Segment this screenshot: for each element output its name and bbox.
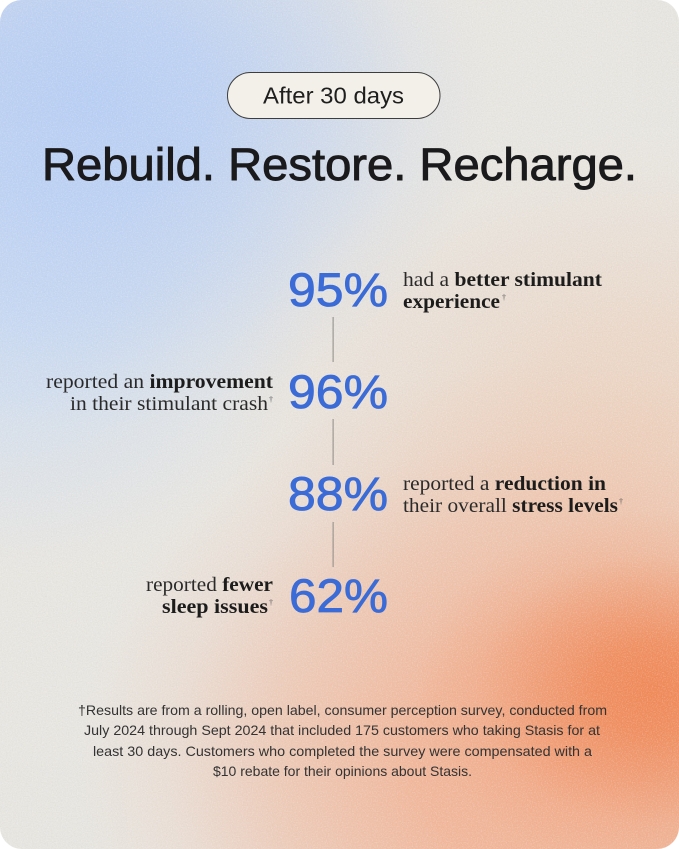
stat: 88% reduction in stress levels: † [619,497,623,506]
title: Rebuild. Restore. Recharge. [42,139,637,190]
stat: 96% improvement in stimulant crash: in their stimulant crash [70,394,268,415]
stat: 62% fewer sleep issues: † [269,598,273,607]
stat: 95% better stimulant experience [288,263,603,316]
stat: 95% better stimulant experience: † [502,293,506,302]
stat: 62% fewer sleep issues [146,569,388,622]
stat: 62% fewer sleep issues: reported fewer [146,575,273,596]
badge: After 30 days [228,72,440,118]
stat: 88% reduction in stress levels: 88% [288,467,388,520]
stat: 95% better stimulant experience: had a better stimulant [403,270,603,291]
stat: 95% better stimulant experience: 95% [288,263,388,316]
stat: 62% fewer sleep issues: sleep issues [162,597,268,618]
stat: 88% reduction in stress levels: reported a reduction in [403,474,606,495]
badge: After 30 days: After 30 days [263,82,404,108]
footnote: †Results are from a rolling, open label, consumer perception survey, conducted from [78,702,607,718]
stat: 96% improvement in stimulant crash: 96% [288,365,388,418]
connector line [333,317,334,362]
footnote: least 30 days. Customers who completed the survey were compensated with a [93,743,592,759]
connector line [333,419,334,465]
connector line [333,522,334,567]
footnote [78,702,607,779]
footnote: July 2024 through Sept 2024 that included 175 customers who taking Stasis for at [84,722,600,738]
stat: 96% improvement in stimulant crash: reported an improvement [46,372,274,393]
stat: 96% improvement in stimulant crash [46,365,388,418]
stat: 88% reduction in stress levels [288,467,623,520]
stat: 95% better stimulant experience: experience [403,292,500,313]
stat: 62% fewer sleep issues: 62% [289,569,388,622]
stat: 96% improvement in stimulant crash: † [269,395,273,404]
footnote: $10 rebate for their opinions about Stasis. [213,763,472,779]
stat: 88% reduction in stress levels: their overall stress levels [403,496,618,517]
